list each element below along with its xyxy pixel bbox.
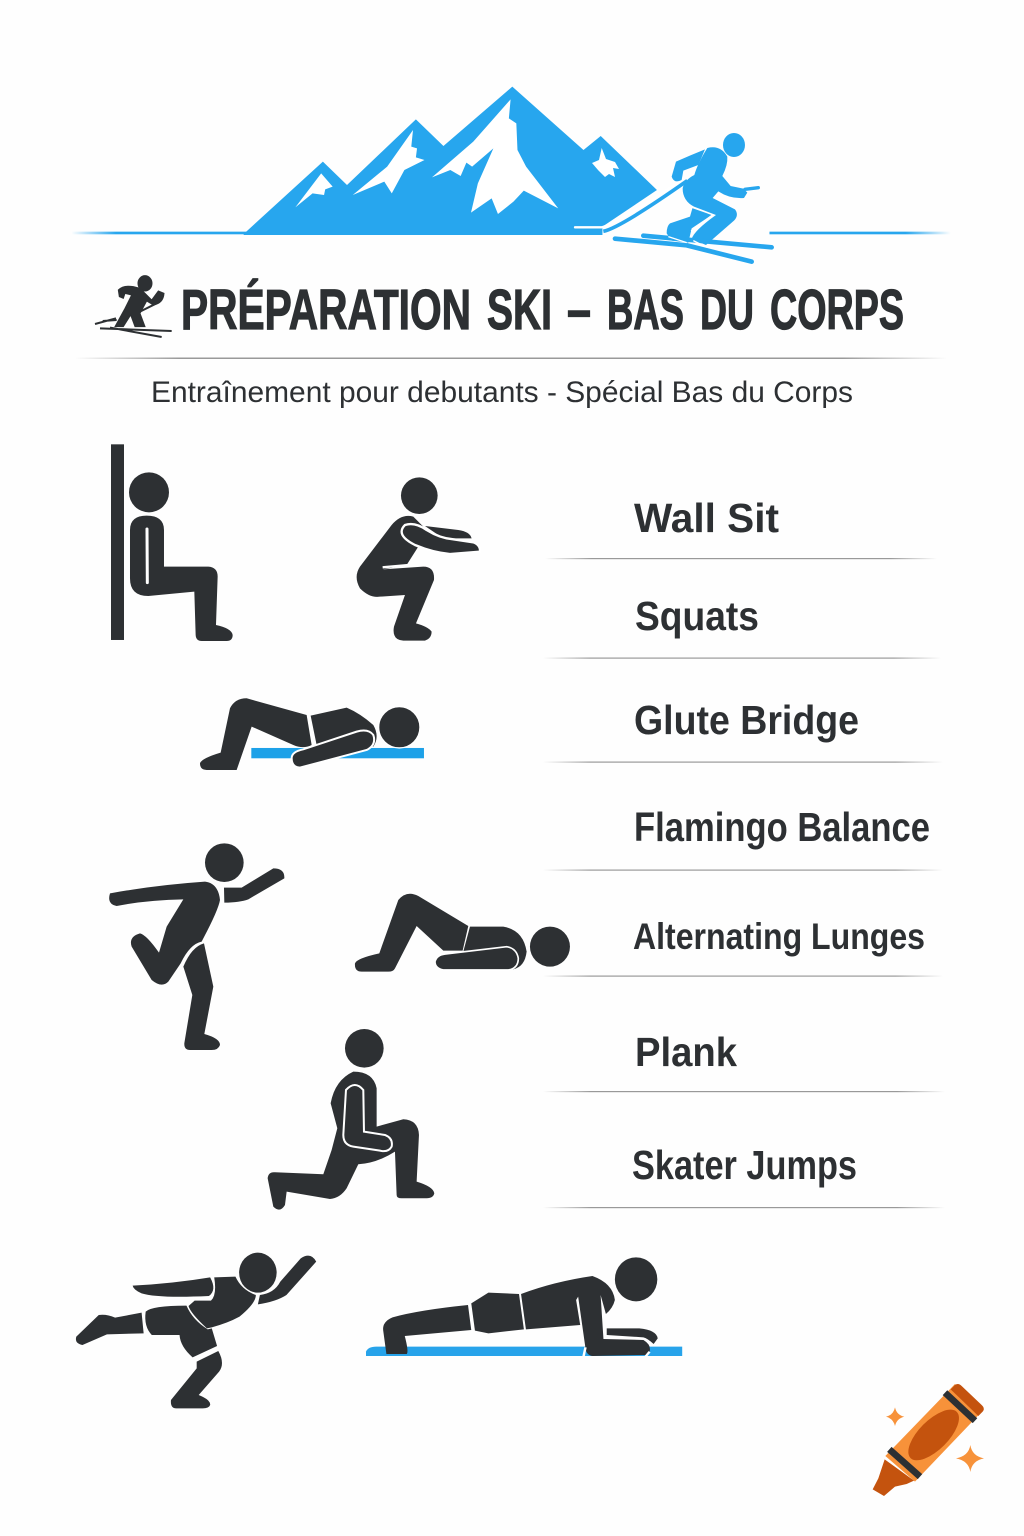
title: – <box>567 278 591 342</box>
label: Skater Jumps: Skater Jumps <box>632 1142 857 1188</box>
icon: skier <box>575 133 772 262</box>
figure: lunge <box>268 1029 434 1210</box>
figure: wall sit <box>111 444 233 641</box>
figure: squat <box>357 477 480 641</box>
title: DU <box>700 278 754 342</box>
label: Glute Bridge: Glute Bridge <box>634 697 859 743</box>
title divider <box>75 358 947 359</box>
title: CORPS <box>770 278 904 342</box>
title <box>95 276 904 342</box>
figure: plank <box>366 1257 682 1357</box>
label: Plank: Plank <box>635 1029 737 1075</box>
title: PRÉPARATION <box>181 278 471 342</box>
icon: small skier <box>95 276 172 337</box>
figure: alternating lunges <box>355 894 570 972</box>
label: Wall Sit: Wall Sit <box>634 495 779 541</box>
icon: snow patch on right peak <box>592 148 619 177</box>
label: Alternating Lunges: Alternating Lunges <box>633 916 925 957</box>
figure: glute bridge <box>200 698 424 770</box>
exercise list <box>543 495 945 1208</box>
icon: crayon with sparkles <box>873 1384 984 1496</box>
figure: skater jump <box>76 1253 316 1408</box>
subtitle: Entraînement pour debutants - Spécial Bas du Corps <box>151 376 853 409</box>
label: Flamingo Balance: Flamingo Balance <box>634 804 930 850</box>
title: SKI <box>487 278 552 342</box>
figure: flamingo balance <box>109 843 284 1050</box>
header illustration: mountains and skier <box>71 87 951 262</box>
icon: mountains with horizon <box>71 87 951 235</box>
title: BAS <box>607 278 684 342</box>
label: Squats: Squats <box>635 593 759 639</box>
